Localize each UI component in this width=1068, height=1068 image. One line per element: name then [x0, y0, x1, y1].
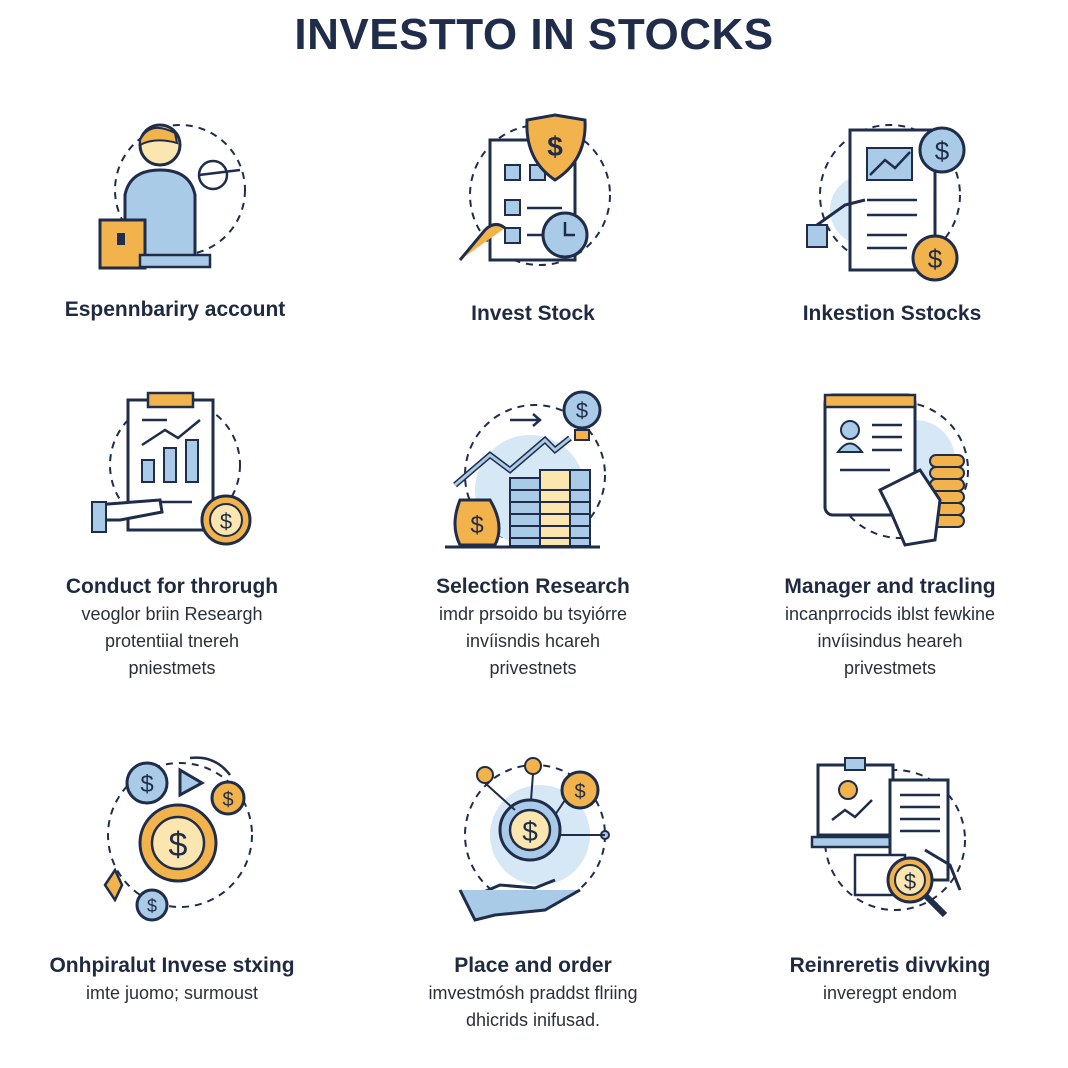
label: selection research: Selection Research: [436, 575, 630, 598]
label: place and order: dhicrids inifusad.: [466, 1010, 600, 1030]
label: manager: [784, 575, 996, 678]
icon: report with coins: $: [928, 244, 943, 274]
label: invest stock: Invest Stock: [471, 302, 595, 325]
label: place and order: Place and order: [454, 954, 612, 977]
label: selection research: invíisndis hcareh: [466, 631, 600, 651]
label: manager: invíisindus heareh: [817, 631, 963, 651]
label: conduct: Conduct for throrugh: [66, 575, 278, 598]
label: manager: privestmets: [844, 658, 936, 678]
label: onhpiralut: imte juomo; surmoust: [86, 983, 258, 1003]
label: conduct: veoglor briin Researgh: [81, 604, 263, 624]
icon: growth chart with coins: $: [576, 398, 588, 423]
label: manager: incanprrocids iblst fewkine: [785, 604, 995, 624]
label: reinreretis: [790, 954, 990, 1003]
label: onhpiralut: [49, 954, 295, 1003]
icon: growth chart with coins: [445, 390, 606, 548]
icon: hand with coin network: $: [522, 816, 538, 847]
label: account: Espennbariry account: [65, 298, 285, 321]
icon: clipboard chart: $: [220, 509, 232, 534]
label: selection research: privestnets: [489, 658, 577, 678]
icon: coins flow: $: [169, 826, 188, 864]
label: onhpiralut: Onhpiralut Invese stxing: [49, 954, 295, 977]
icon: coins flow: [104, 756, 253, 922]
icon: laptop with magnifier: [810, 757, 966, 918]
label: reinreretis: Reinreretis divvking: [790, 954, 990, 977]
icon: report with coins: [806, 124, 966, 282]
label: selection research: imdr prsoido bu tsyiórre: [439, 604, 627, 624]
label: manager: Manager and tracling: [784, 575, 996, 598]
label: conduct: [66, 575, 278, 678]
icon: coins flow: $: [140, 771, 154, 798]
icon: report with coins: $: [935, 136, 950, 166]
label: place and order: imvestmósh praddst flriing: [428, 983, 638, 1003]
label: conduct: pniestmets: [128, 658, 216, 678]
icon: profile doc with coins: [824, 394, 969, 547]
icon: coins flow: $: [147, 896, 157, 916]
icon: hand with coin network: [458, 757, 610, 922]
label: selection research: [436, 575, 630, 678]
icon: hand with coin network: $: [574, 781, 586, 803]
label: conduct: protentiial tnereh: [105, 631, 239, 651]
icon: checklist with shield: [458, 114, 611, 266]
label: reinreretis: inveregpt endom: [823, 983, 957, 1003]
label: inkestion: Inkestion Sstocks: [803, 302, 981, 325]
icon: person with account: [98, 124, 246, 270]
icon: clipboard chart: [91, 392, 252, 546]
label: place and order: [428, 954, 638, 1030]
icon: laptop with magnifier: $: [904, 869, 916, 894]
icon: checklist with shield: $: [547, 131, 563, 162]
icon: coins flow: $: [222, 789, 234, 811]
title: INVESTTO IN STOCKS: [294, 10, 774, 59]
icon: growth chart with coins: $: [470, 512, 484, 539]
